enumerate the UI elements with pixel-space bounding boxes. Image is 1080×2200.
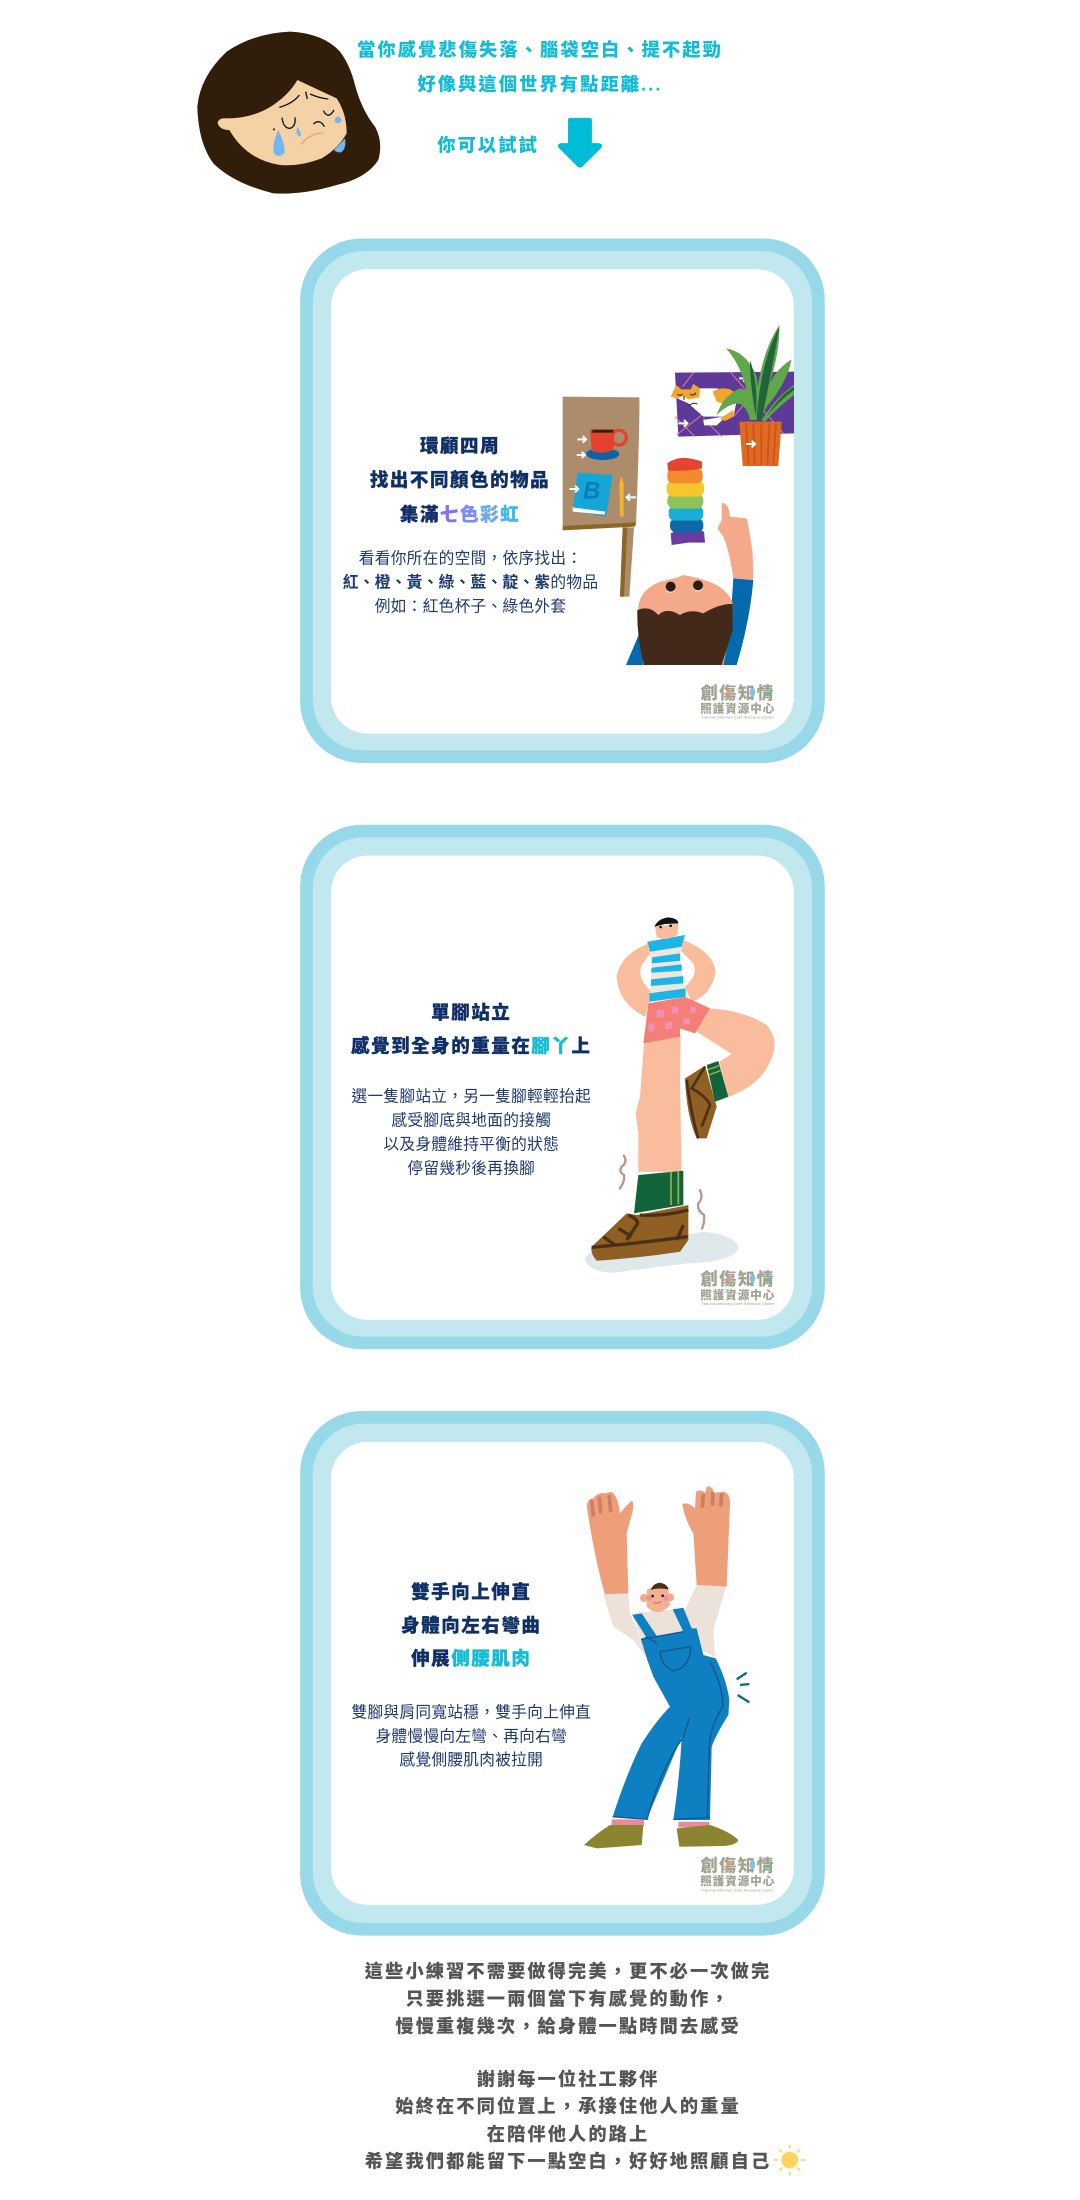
logo: Trauma-Informed Care Resource Center — [701, 1887, 775, 1892]
potted plant — [717, 325, 794, 466]
try this label: 你可以試試 — [437, 134, 539, 155]
header text — [357, 39, 723, 94]
head — [654, 917, 678, 939]
book: B — [583, 477, 600, 504]
arms — [587, 1492, 633, 1595]
header illustration: crying girl — [197, 32, 380, 194]
card 3 body text: 身體慢慢向左彎、再向右彎 — [375, 1726, 567, 1745]
closing message 1 — [365, 1961, 771, 2036]
arrows — [569, 436, 636, 501]
closing message 1: 這些小練習不需要做得完美，更不必一次做完 — [365, 1961, 771, 1982]
torso — [632, 1608, 703, 1660]
card 1 body text: 看看你所在的空間，依序找出： — [359, 550, 582, 568]
card 1 heading — [370, 435, 550, 525]
child looking up — [626, 503, 753, 665]
shoes — [584, 1825, 738, 1848]
card 1 heading: 環顧四周 — [420, 435, 500, 456]
panel: card 2 stand on one foot — [300, 825, 825, 1349]
closing message 2: 謝謝每一位社工夥伴 — [477, 2069, 660, 2090]
logo — [700, 1269, 775, 1306]
icon: down arrow — [558, 118, 602, 168]
sleeves — [603, 1585, 726, 1667]
card 3 body text: 雙腳與肩同寬站穩，雙手向上伸直 — [352, 1703, 591, 1721]
card 3 heading — [401, 1581, 541, 1669]
card 2 body text: 以及身體維持平衡的狀態 — [383, 1134, 559, 1153]
rainbow stack — [667, 458, 705, 545]
card 3 heading: 雙手向上伸直 — [411, 1581, 531, 1602]
logo: 照護資源中心 — [700, 1874, 775, 1888]
book — [573, 473, 613, 517]
socks — [634, 1171, 683, 1213]
shoes — [591, 1205, 688, 1261]
logo: Trauma-Informed Care Resource Center — [701, 1301, 775, 1306]
card 2 heading: 單腳站立 — [431, 1002, 511, 1023]
panel: card 1 find rainbow colours — [300, 238, 825, 763]
card 2 body text: 感受腳底與地面的接觸 — [391, 1111, 551, 1130]
card 2 heading: 感覺到全身的重量在腳丫上 — [351, 1036, 592, 1057]
shorts — [643, 997, 710, 1043]
card 1 heading: 找出不同顏色的物品 — [370, 470, 550, 491]
illustration: man with arms raised in overalls — [584, 1486, 749, 1848]
logo: 照護資源中心 — [700, 702, 775, 716]
rug with cat — [671, 372, 794, 437]
mug — [586, 429, 626, 460]
card 3 body text — [352, 1703, 591, 1769]
shadow — [585, 1232, 738, 1273]
card 2 body text: 選一隻腳站立，另一隻腳輕輕抬起 — [352, 1088, 591, 1106]
closing message 1: 慢慢重複幾次，給身體一點時間去感受 — [395, 2015, 741, 2036]
card 3 heading: 伸展側腰肌肉 — [411, 1648, 531, 1669]
table — [563, 397, 639, 597]
closing message 2: 始終在不同位置上，承接住他人的重量 — [395, 2095, 741, 2116]
closing message 2: 在陪伴他人的路上 — [487, 2123, 649, 2144]
logo — [700, 1855, 775, 1892]
card 2 body text — [352, 1088, 591, 1177]
stretch lines — [737, 1673, 749, 1702]
card 2 body text: 停留幾秒後再換腳 — [407, 1159, 535, 1177]
header text: 當你感覺悲傷失落、腦袋空白、提不起勁 — [357, 39, 723, 60]
card 1 body text — [343, 550, 598, 615]
overalls — [613, 1608, 729, 1820]
head — [640, 1583, 674, 1612]
logo — [700, 683, 775, 720]
closing message 2: 希望我們都能留下一點空白，好好地照顧自己 — [365, 2151, 771, 2172]
illustration: person standing on one leg — [585, 917, 775, 1273]
logo: 創傷知情 — [700, 1855, 775, 1875]
pencil — [619, 476, 624, 517]
illustration: table, rug, plant, rainbow, pointing child — [563, 325, 794, 665]
logo: 照護資源中心 — [700, 1288, 775, 1302]
icon: sun — [774, 2145, 805, 2175]
closing message 1: 只要挑選一兩個當下有感覺的動作， — [405, 1988, 731, 2009]
card 1 heading: 集滿七色彩虹 — [400, 504, 520, 525]
logo: Trauma-Informed Care Resource Center — [701, 715, 775, 720]
header text: 好像與這個世界有點距離... — [417, 73, 663, 94]
socks — [612, 1819, 709, 1827]
card 1 body text: 紅、橙、黃、綠、藍、靛、紫的物品 — [343, 572, 598, 591]
closing message 2 — [365, 2069, 771, 2172]
card 1 body text: 例如：紅色杯子、綠色外套 — [375, 597, 566, 615]
logo: 創傷知情 — [700, 1269, 775, 1289]
squiggles — [619, 1155, 704, 1229]
card 3 body text: 感覺側腰肌肉被拉開 — [399, 1750, 543, 1769]
legs — [636, 1035, 682, 1172]
card 2 heading — [351, 1002, 592, 1057]
panel: card 3 arms up side stretch — [300, 1411, 825, 1936]
logo: 創傷知情 — [700, 683, 775, 703]
striped shirt — [647, 935, 686, 1002]
card 3 heading: 身體向左右彎曲 — [401, 1615, 541, 1636]
arms — [617, 940, 716, 1017]
